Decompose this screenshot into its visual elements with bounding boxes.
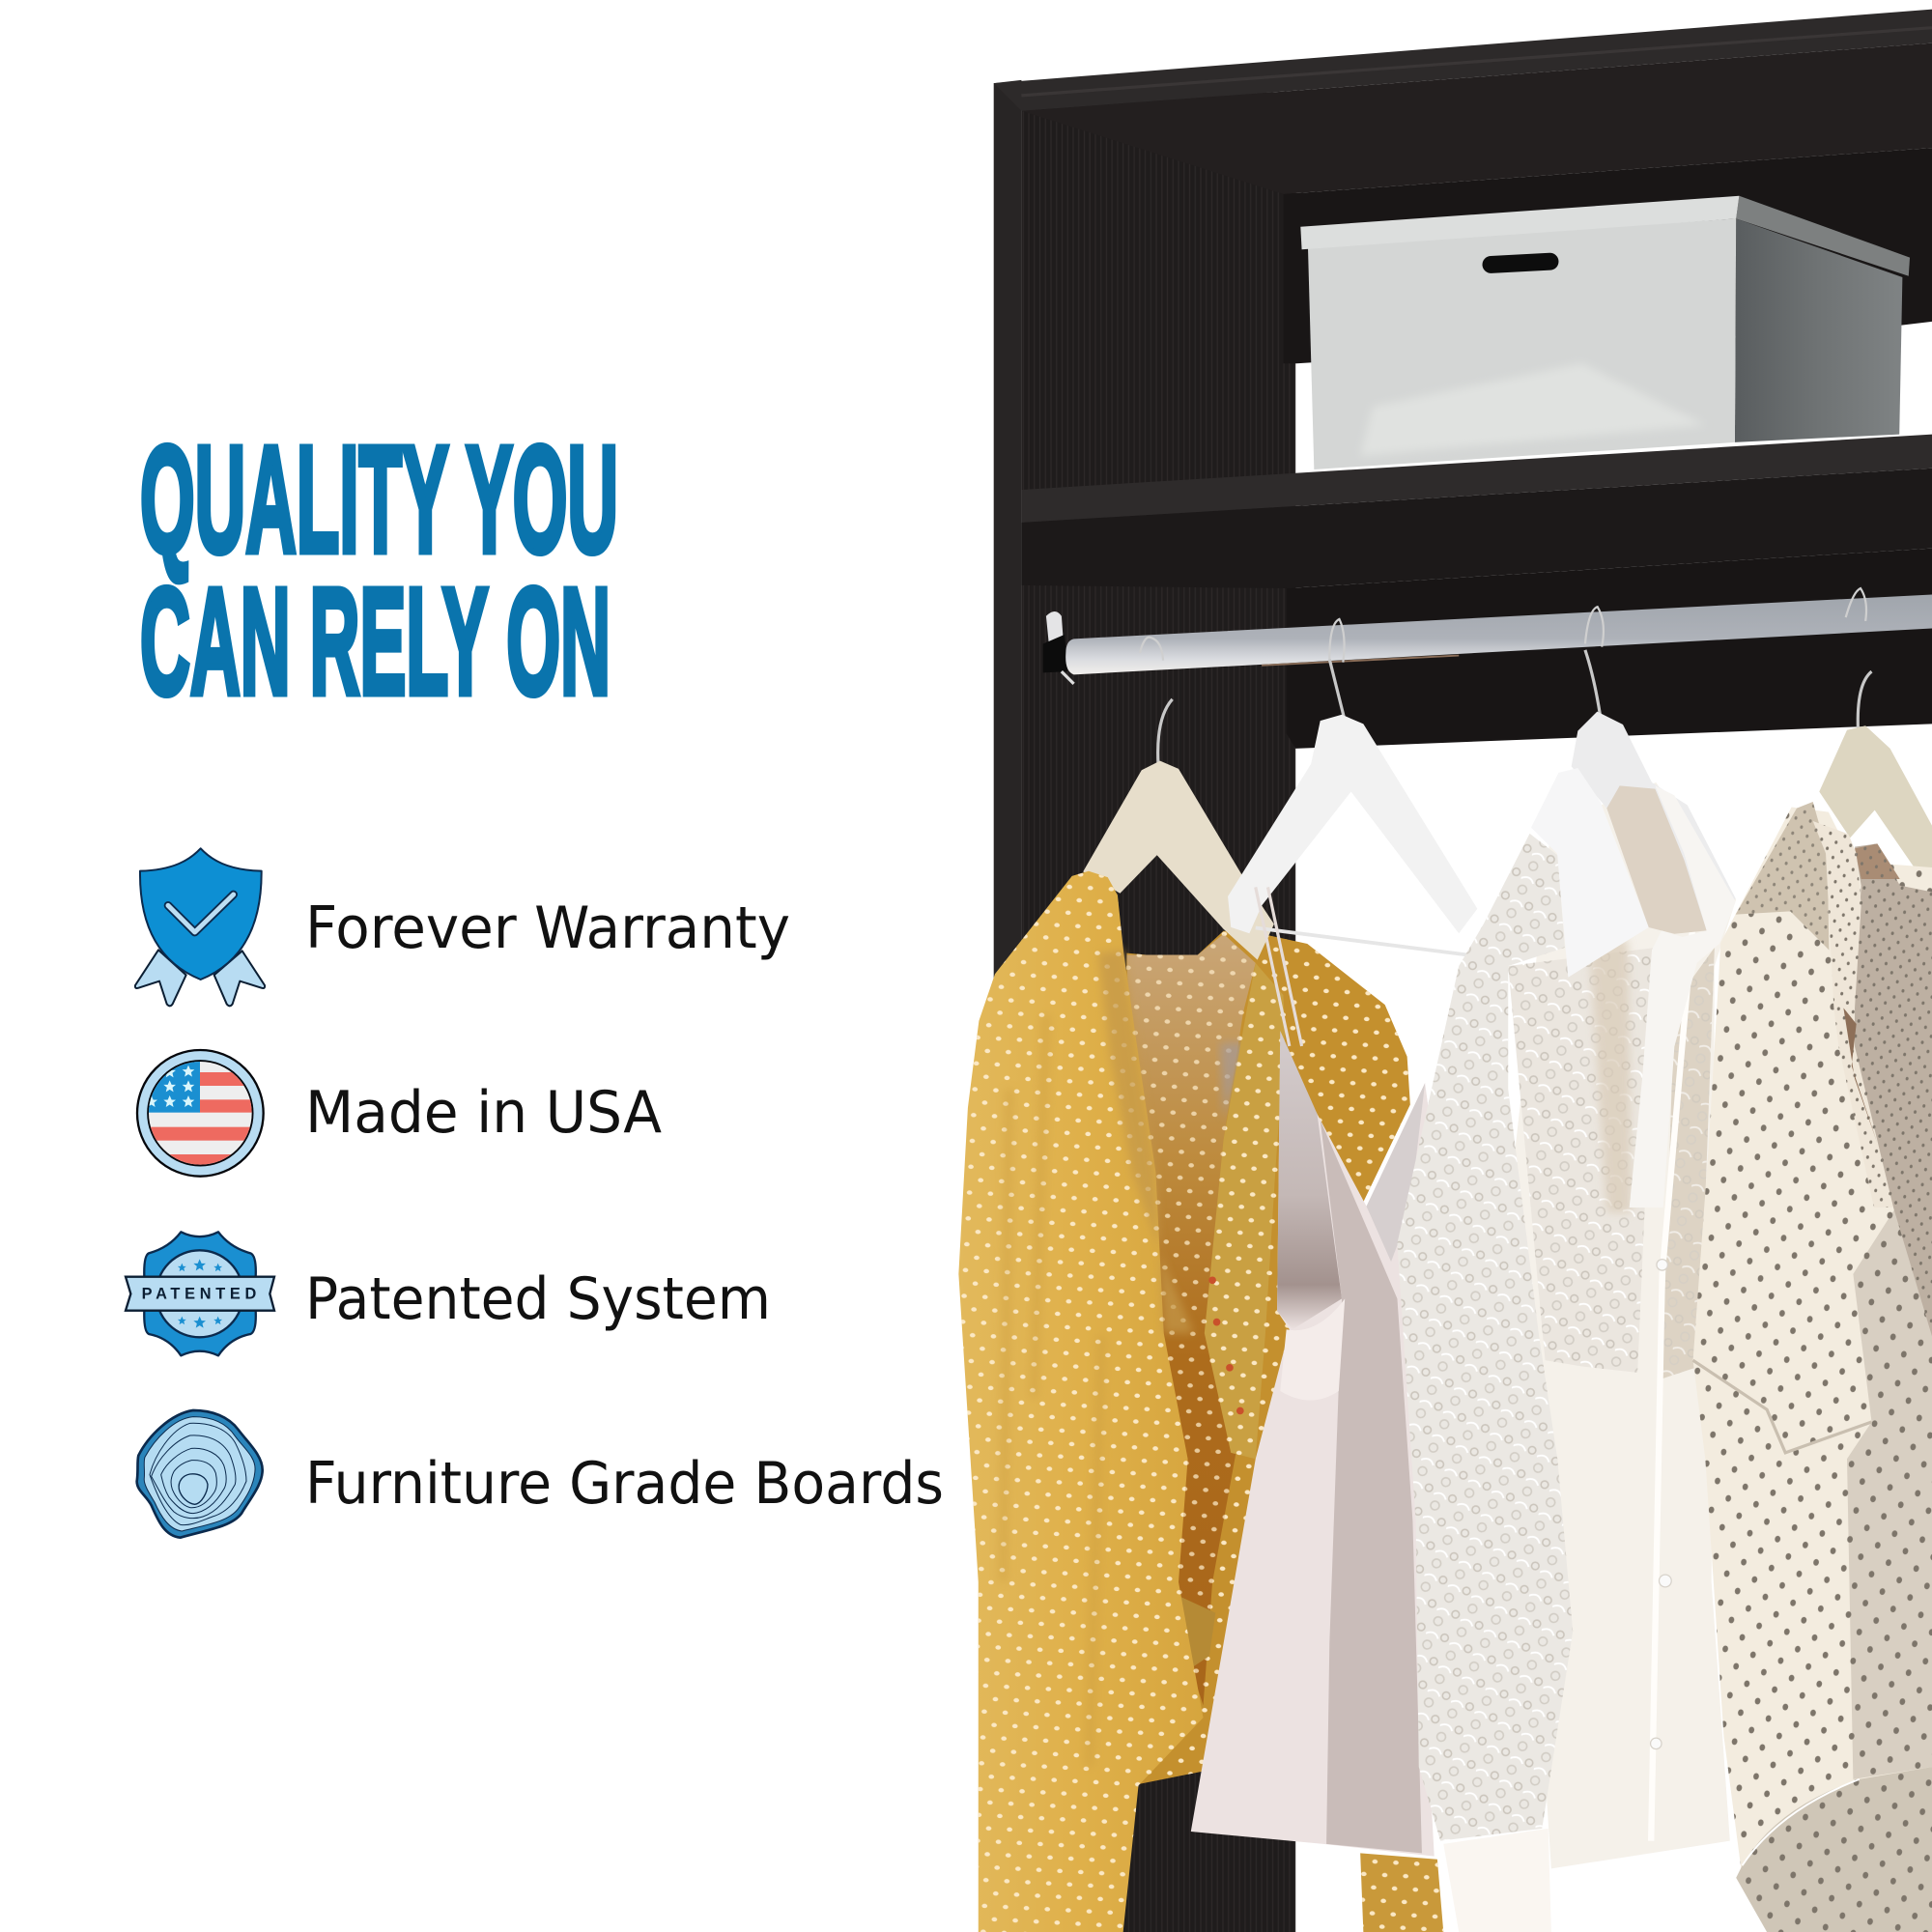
middle shelf	[1021, 435, 1932, 749]
white shirt	[1508, 782, 1736, 1868]
hanger hook wires	[1158, 650, 1872, 764]
white hanger three and collar	[1531, 712, 1736, 1208]
dotted blouse	[1693, 807, 1932, 1932]
icon: shield warranty	[135, 848, 265, 1006]
label: forever warranty: Forever Warranty	[305, 895, 790, 962]
yellow garment body	[1120, 931, 1410, 1785]
icon: wood rings	[137, 1410, 263, 1538]
blouse shoulder and placket	[1736, 802, 1932, 1336]
wardrobe top board and ceiling	[994, 10, 1932, 363]
title	[140, 415, 618, 726]
cream hanger left	[1083, 761, 1274, 960]
pink camisole	[1191, 887, 1435, 1857]
photo: wardrobe with clothes	[958, 10, 1932, 1932]
yellow garment lower tail	[1360, 1853, 1443, 1932]
infographic canvas: QUALITY YOU	[140, 415, 618, 584]
wardrobe side panel	[994, 80, 1295, 1932]
cream hanger four	[1819, 725, 1932, 894]
icon: patented seal	[126, 1232, 274, 1355]
infographic canvas: CAN RELY ON	[140, 557, 611, 726]
shirt cuff	[1443, 1829, 1551, 1932]
label: furniture grade boards: Furniture Grade Boards	[305, 1450, 944, 1518]
feature list	[126, 848, 944, 1538]
storage box	[1300, 196, 1910, 469]
chrome hanging rod	[1043, 588, 1932, 684]
white hanger two	[1228, 715, 1477, 956]
yellow sleeve	[958, 871, 1204, 1932]
label: patented system: Patented System	[305, 1265, 771, 1333]
icon: patented seal: PATENTED	[142, 1286, 257, 1303]
lace sleeve	[1397, 834, 1573, 1841]
label: made in usa: Made in USA	[305, 1079, 662, 1147]
icon: usa flag badge	[137, 1050, 264, 1177]
